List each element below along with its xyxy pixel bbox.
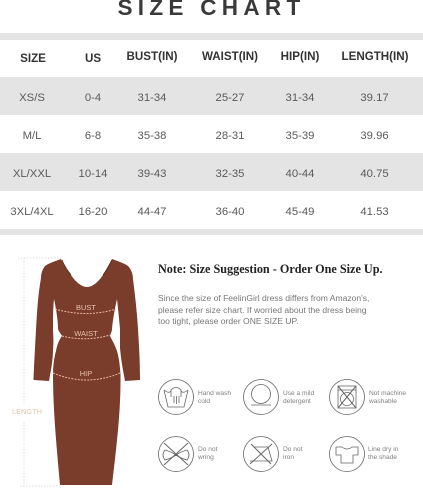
waist measure: WAIST	[74, 329, 98, 338]
icon: do not iron	[244, 436, 278, 472]
label: do not wring	[198, 446, 218, 461]
table: size chart: M/L	[23, 130, 41, 142]
table: size chart: 0-4	[85, 92, 101, 104]
table: size chart: 40.75	[360, 168, 389, 180]
row XL/XXL	[13, 168, 389, 180]
table: size chart: 28-31	[216, 130, 244, 142]
header: SIZE: SIZE	[20, 52, 46, 65]
label: mild detergent: detergent	[283, 398, 311, 405]
neckline shade	[62, 260, 112, 275]
table: size chart: 39.17	[360, 92, 389, 104]
label: line dry: Line dry in	[368, 446, 398, 453]
table: size chart: 40-44	[286, 168, 314, 180]
table: size chart: 39-43	[138, 168, 166, 180]
hip measure	[53, 369, 120, 380]
header: HIP: HIP(IN)	[281, 50, 319, 63]
header: US: US	[85, 52, 101, 65]
note body: please refer size chart. If worried about the dress being	[158, 305, 367, 315]
label: do not iron	[283, 446, 302, 461]
note heading: Note: Size Suggestion - Order One Size Up.	[158, 262, 383, 276]
icon: no machine wash	[330, 380, 364, 414]
row band: XS/S	[0, 77, 423, 115]
length label: LENGTH	[12, 407, 42, 416]
label: do not wring: Do not	[198, 446, 217, 453]
table: size chart: XS/S	[19, 92, 45, 104]
note body: too tight, please order ONE SIZE UP.	[158, 316, 298, 326]
note body: Since the size of FeelinGirl dress differs from Amazon's,	[158, 293, 369, 303]
table: size chart: 45-49	[286, 206, 314, 218]
table: size chart: 35-39	[286, 130, 314, 142]
icon: do not wring	[158, 436, 194, 472]
table: size chart: 25-27	[216, 92, 244, 104]
label: hand wash cold: cold	[198, 398, 210, 405]
row 3XL/4XL	[10, 206, 389, 218]
note body	[158, 293, 369, 326]
table: size chart: 16-20	[79, 206, 107, 218]
table: size chart: 44-47	[138, 206, 166, 218]
length guide	[18, 258, 63, 486]
table: size chart: 41.53	[360, 206, 389, 218]
top divider band	[0, 33, 423, 40]
dress	[34, 259, 140, 485]
label: line dry	[368, 446, 398, 461]
table: size chart: 10-14	[79, 168, 107, 180]
table: size chart: 35-38	[138, 130, 166, 142]
icon: hand wash	[158, 380, 194, 414]
header: LENGTH: LENGTH(IN)	[342, 50, 408, 63]
label: do not wring: wring	[198, 454, 214, 461]
label: do not iron: iron	[283, 454, 294, 461]
table: size chart: 6-8	[85, 130, 101, 142]
row band: bottom	[0, 229, 423, 235]
row XS/S	[19, 92, 389, 104]
table: size chart: 31-34	[138, 92, 166, 104]
label: not machine washable: Not machine	[369, 390, 406, 397]
table: size chart	[0, 50, 423, 235]
dress measurement diagram	[12, 258, 140, 486]
label: do not iron: Do not	[283, 446, 302, 453]
label: hand wash cold: Hand wash	[198, 390, 231, 397]
hip measure: HIP	[80, 369, 92, 378]
label: mild detergent	[283, 390, 314, 405]
table: size chart: 32-35	[216, 168, 244, 180]
table: size chart: 3XL/4XL	[10, 206, 54, 218]
icon: mild detergent	[244, 380, 278, 414]
label: mild detergent: Use a mild	[283, 390, 314, 397]
waist measure	[62, 329, 110, 339]
row M/L	[23, 130, 389, 142]
bust measure	[55, 303, 116, 314]
table: size chart: 31-34	[286, 92, 314, 104]
row band: XL/XXL	[0, 153, 423, 191]
table: size chart: 36-40	[216, 206, 244, 218]
label: hand wash cold	[198, 390, 231, 405]
table: size chart: 39.96	[360, 130, 389, 142]
header: WAIST: WAIST(IN)	[202, 50, 258, 63]
label: line dry: the shade	[368, 454, 397, 461]
icon: line dry in shade	[330, 436, 364, 472]
table: size chart: XL/XXL	[13, 168, 51, 180]
header: BUST: BUST(IN)	[127, 50, 177, 63]
bust measure: BUST	[76, 303, 96, 312]
label: not machine washable	[369, 390, 406, 405]
label: not machine washable: washable	[369, 398, 397, 405]
